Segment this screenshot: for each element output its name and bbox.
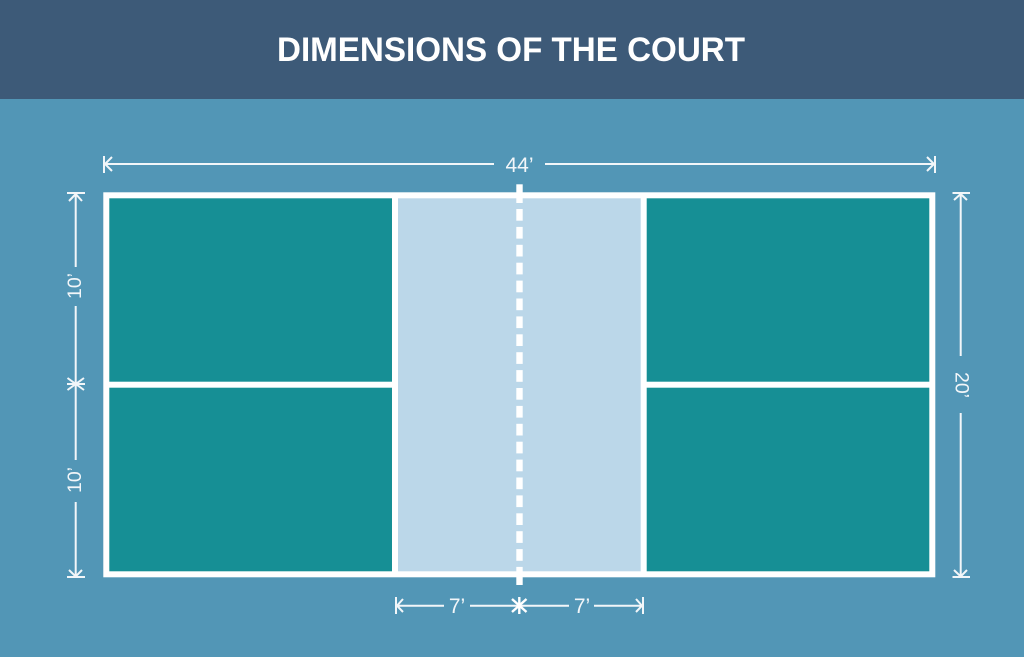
court: service box top right <box>644 195 932 385</box>
dimension: right 7 feet <box>519 595 643 618</box>
court: dashed net <box>516 184 523 585</box>
dimension: upper 10 feet <box>64 193 86 390</box>
court: service box top left <box>106 195 395 385</box>
court: right center line <box>646 382 932 388</box>
dimension: upper 10 feet: 10’ <box>64 273 86 299</box>
dimension: 20 feet height <box>950 193 972 577</box>
dimension: 20 feet height: 20’ <box>950 372 972 398</box>
court: service box bottom left <box>106 385 395 574</box>
court: service box bottom right <box>644 385 932 574</box>
dimension: right 7 feet: 7’ <box>574 595 590 618</box>
dimension: left 7 feet: 7’ <box>449 595 465 618</box>
dimension: center tick mark <box>512 597 526 614</box>
dimension: left 7 feet <box>396 595 519 618</box>
court: left center line <box>106 382 392 388</box>
dimension: 44 feet width <box>104 154 935 177</box>
court: left non-volley line <box>392 195 398 574</box>
court: boundary lines <box>106 195 932 574</box>
pickleball court <box>106 184 932 585</box>
dimension: lower 10 feet <box>64 384 86 577</box>
panel: header band <box>0 0 1024 99</box>
court: right non-volley line <box>641 195 647 574</box>
court: non-volley zone <box>395 195 644 574</box>
dimension: lower 10 feet: 10’ <box>64 467 86 493</box>
title: DIMENSIONS OF THE COURT <box>277 31 745 69</box>
dimension: 44 feet width: 44’ <box>505 154 534 177</box>
